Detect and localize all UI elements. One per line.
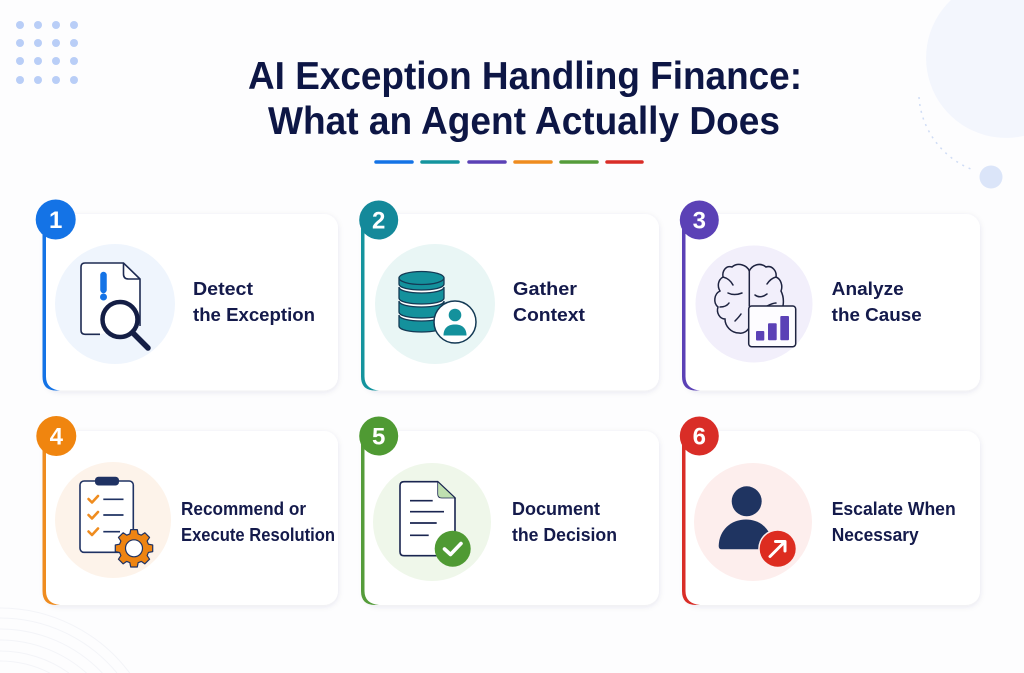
step 5 label: Document bbox=[512, 498, 600, 519]
step 5 label: the Decision bbox=[512, 524, 617, 545]
step 4 label: Execute Resolution bbox=[181, 524, 335, 545]
step 3 label: Analyze bbox=[832, 278, 904, 299]
step 4 badge: 4 bbox=[50, 424, 64, 450]
step 4 icon: checklist clipboard with gear bbox=[55, 462, 171, 578]
step 6 label bbox=[832, 498, 956, 545]
step 1 label: Detect bbox=[193, 278, 253, 299]
step 2 badge bbox=[359, 200, 398, 240]
panel: step 1 detect the exception bbox=[36, 200, 338, 390]
step 1 label bbox=[193, 278, 315, 325]
step 2 label: Context bbox=[513, 304, 585, 325]
step 2 icon: database with user bbox=[375, 244, 495, 364]
step 6 icon: person with escalation arrow bbox=[694, 463, 812, 581]
step 3 label: the Cause bbox=[832, 304, 922, 325]
title divider: six coloured dashes bbox=[376, 160, 642, 164]
step 2 label bbox=[513, 278, 585, 325]
decoration: top right circles and dotted arc bbox=[919, 0, 1024, 188]
step 5 badge bbox=[359, 416, 398, 456]
panel: step 3 analyze the cause bbox=[680, 200, 980, 390]
step 4 label bbox=[181, 498, 335, 545]
step 5 label bbox=[512, 498, 617, 545]
step 3 badge bbox=[680, 200, 719, 240]
step 1 badge: 1 bbox=[49, 207, 62, 234]
step 6 label: Necessary bbox=[832, 524, 919, 545]
title bbox=[248, 55, 802, 143]
title: What an Agent Actually Does bbox=[268, 100, 780, 143]
step 3 badge: 3 bbox=[693, 208, 706, 234]
step 5 badge: 5 bbox=[372, 424, 385, 450]
panel: step 6 escalate when necessary bbox=[680, 416, 980, 605]
panel: step 5 document the decision bbox=[359, 416, 659, 605]
panel: step 4 recommend or execute resolution bbox=[36, 416, 338, 605]
step 6 label: Escalate When bbox=[832, 498, 956, 519]
step 2 label: Gather bbox=[513, 278, 577, 299]
decoration: dot grid bbox=[16, 21, 78, 84]
step 1 badge bbox=[36, 200, 76, 240]
decoration: bottom left arcs bbox=[0, 608, 130, 673]
step 3 label bbox=[832, 278, 922, 325]
step 4 badge bbox=[36, 416, 76, 456]
step 2 badge: 2 bbox=[372, 208, 385, 234]
step 1 label: the Exception bbox=[193, 304, 315, 325]
step 6 badge: 6 bbox=[693, 424, 706, 450]
step 6 badge bbox=[680, 416, 719, 456]
title: AI Exception Handling Finance: bbox=[248, 55, 802, 98]
step 5 icon: document with check bbox=[373, 463, 491, 581]
step 4 label: Recommend or bbox=[181, 498, 306, 519]
step 3 icon: brain with bar chart bbox=[696, 246, 812, 362]
step 1 icon: document with magnifier bbox=[55, 244, 175, 364]
panel: step 2 gather context bbox=[359, 200, 659, 390]
